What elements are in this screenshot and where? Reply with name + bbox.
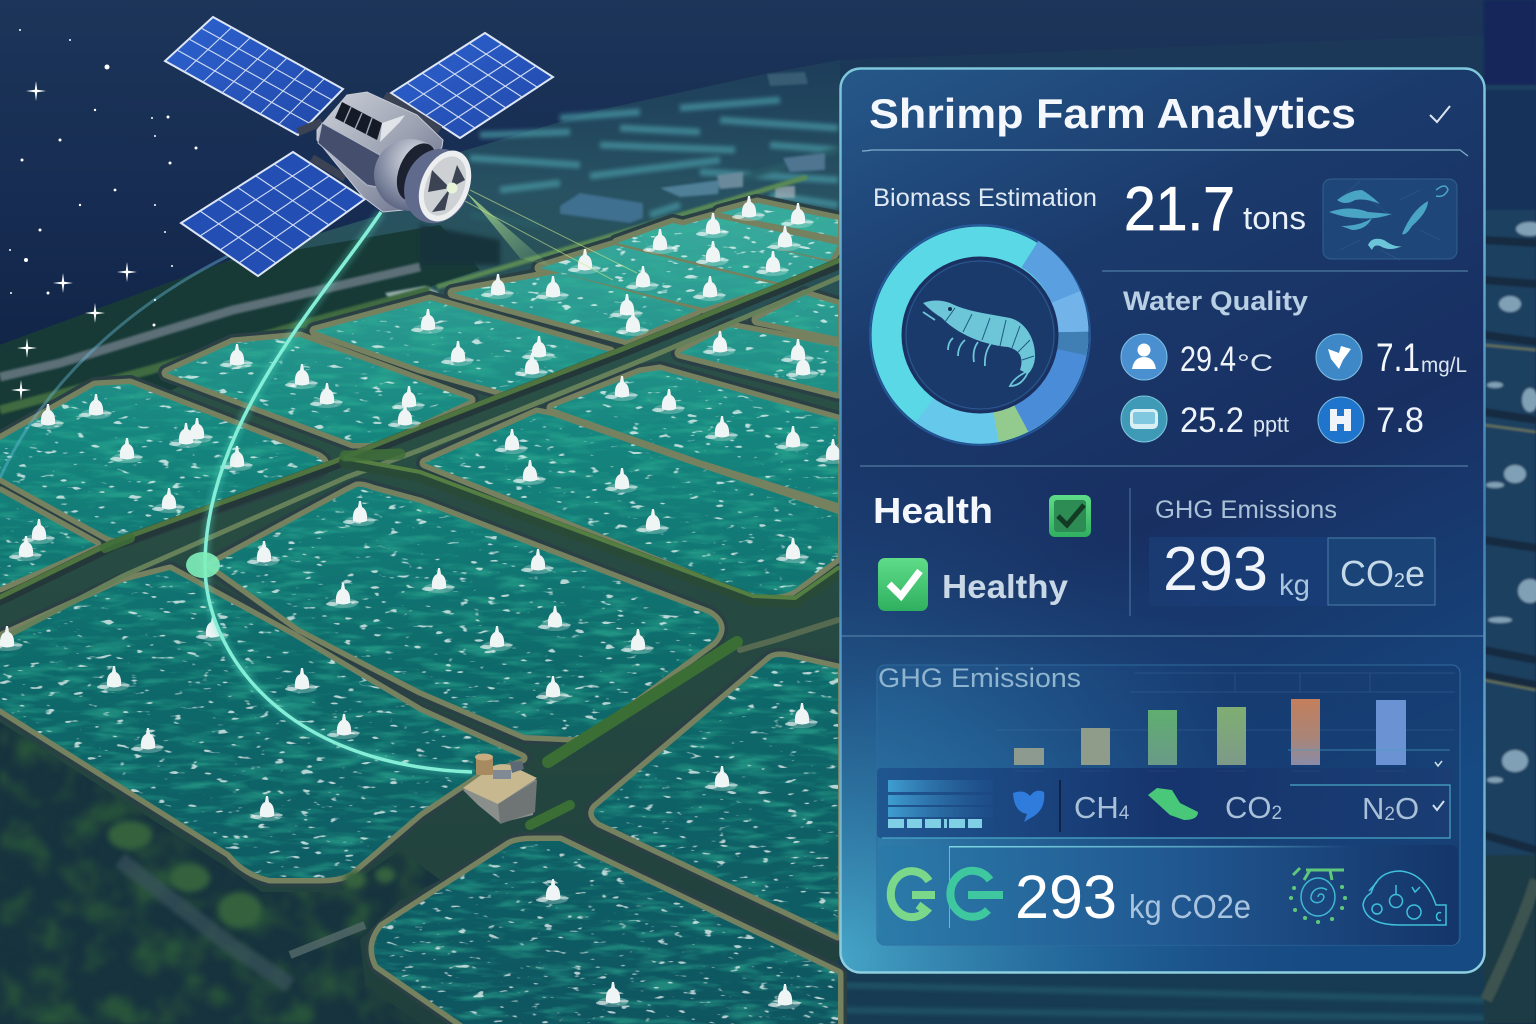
- perimeter roads: [0, 177, 807, 410]
- shrimp ponds water: [0, 203, 838, 1024]
- GHG total row: [878, 845, 1458, 945]
- chart title: GHG Emissions: [878, 663, 1081, 693]
- water quality section: [1121, 286, 1467, 443]
- shrimp icon: [923, 300, 1035, 386]
- healthy status: Healthy: [942, 568, 1069, 605]
- far aerators: [481, 196, 814, 336]
- GHG total unit: kg: [1279, 569, 1310, 602]
- biomass donut gauge: [870, 225, 1090, 445]
- satellite thruster: [389, 137, 481, 233]
- distant blurred ponds: [470, 100, 838, 225]
- icon: salinity: [1121, 396, 1167, 442]
- globe arc and signal curve: [0, 212, 472, 772]
- biomass value: 21.7: [1124, 175, 1235, 244]
- row check mark: [1433, 801, 1444, 810]
- icon: pH: [1318, 397, 1364, 443]
- CO2e label: 2: [1394, 570, 1405, 592]
- satellite beam: [463, 190, 637, 280]
- GHG total value: 293: [1015, 863, 1117, 931]
- satellite: [165, 17, 553, 276]
- header check mark: [1430, 106, 1450, 122]
- distant farm buildings: [385, 72, 825, 307]
- analytics panel: [840, 68, 1485, 973]
- CO2e label: CO: [1340, 553, 1394, 594]
- temperature unit: °C: [1237, 350, 1273, 377]
- icon: sensor dial: [1363, 871, 1446, 925]
- icon: green leaf: [1148, 788, 1198, 820]
- GHG summary section: [1149, 496, 1435, 606]
- mid aerators: [9, 309, 849, 561]
- health heading: Health: [873, 490, 993, 531]
- biomass label: Biomass Estimation: [873, 184, 1097, 212]
- icon: dissolved oxygen: [1316, 334, 1362, 380]
- title: Shrimp Farm Analytics: [869, 90, 1356, 137]
- G logo 1: [891, 871, 935, 917]
- carbon dioxide label: CO: [1225, 790, 1272, 825]
- panel background: [840, 68, 1485, 973]
- methane label: 4: [1119, 803, 1130, 824]
- biomass unit: tons: [1243, 200, 1306, 236]
- biomass section: [870, 175, 1457, 445]
- foliage foreground: [0, 700, 440, 1024]
- stars: [9, 29, 198, 400]
- solar panel lower: [181, 152, 365, 276]
- icon: temperature: [1121, 334, 1167, 380]
- GHG total value: 293: [1163, 535, 1268, 604]
- nitrous oxide label: 2: [1384, 804, 1395, 825]
- solar panel upper left: [165, 17, 343, 135]
- gas legend row: [877, 768, 1452, 838]
- water quality heading: Water Quality: [1123, 286, 1308, 316]
- vegetated dikes: [0, 260, 840, 825]
- shrimp thumbnail: [1323, 179, 1457, 260]
- solar panel upper right: [391, 33, 553, 138]
- nitrous oxide label: O: [1395, 791, 1419, 826]
- satellite body: [317, 92, 443, 212]
- GHG total unit: kg CO2e: [1129, 888, 1251, 925]
- health section: [873, 490, 1091, 611]
- methane label: CH: [1074, 790, 1119, 825]
- GHG label: GHG Emissions: [1155, 496, 1337, 524]
- icon: blue leaf: [1013, 791, 1044, 822]
- icon: spiral gauge: [1291, 868, 1345, 922]
- bar chart: [1014, 699, 1450, 771]
- nitrous oxide label: N: [1362, 791, 1384, 826]
- GHG chart section: [877, 663, 1460, 945]
- dissolved oxygen unit: mg/L: [1421, 354, 1467, 377]
- GHG value box: [1149, 535, 1435, 606]
- salinity value: 25.2: [1180, 401, 1244, 440]
- pH value: 7.8: [1376, 401, 1424, 440]
- G logo 2: [950, 871, 1003, 917]
- monitoring station building: [463, 754, 537, 824]
- large check box: [878, 558, 928, 611]
- small check box: [1049, 495, 1091, 537]
- pond dike walls: [0, 203, 838, 1024]
- mini bars: [888, 780, 993, 828]
- pond aerators: [0, 196, 849, 1009]
- dissolved oxygen value: 7.1: [1376, 336, 1420, 380]
- salinity unit: pptt: [1253, 412, 1289, 437]
- satellite struts: [298, 95, 440, 190]
- temperature value: 29.4: [1180, 340, 1236, 379]
- blurred right edge farmland: [1484, 0, 1536, 1024]
- carbon dioxide label: 2: [1272, 803, 1282, 824]
- CO2e label: e: [1405, 553, 1425, 594]
- near aerators: [0, 429, 818, 1009]
